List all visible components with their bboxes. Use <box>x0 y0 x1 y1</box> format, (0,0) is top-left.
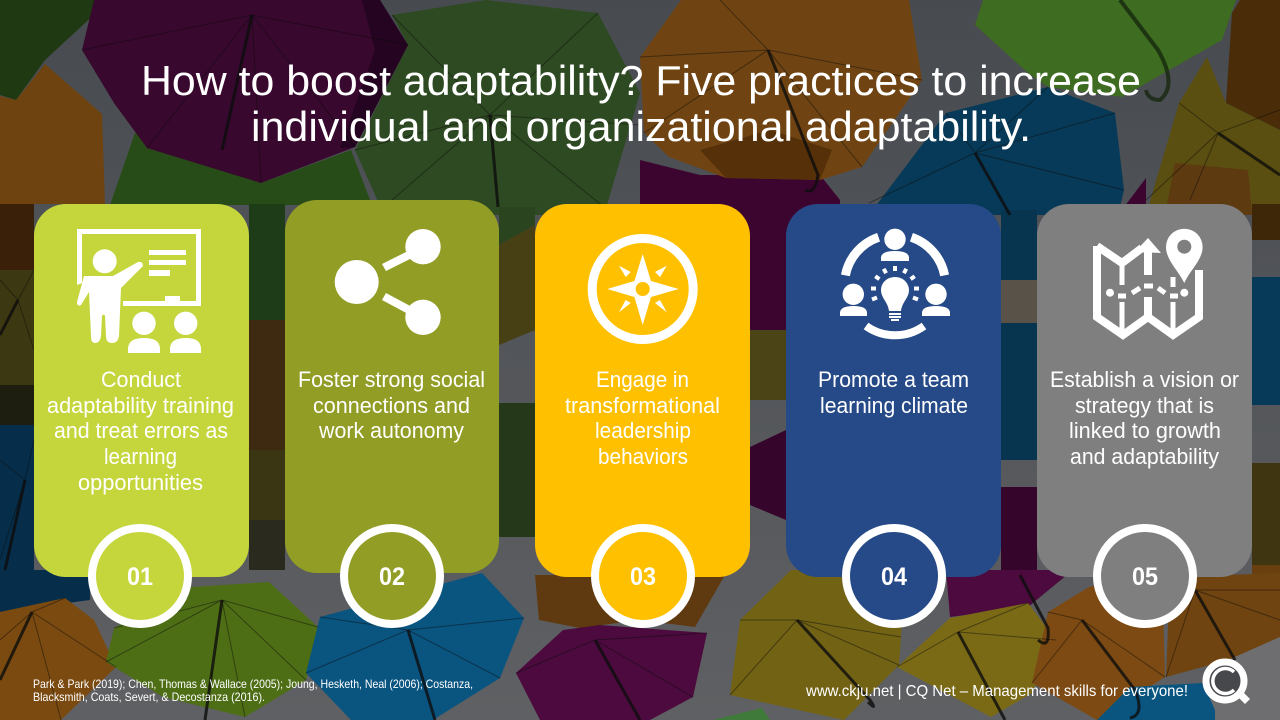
practice 04 text: learning climate <box>820 393 968 418</box>
number badge 01 <box>92 528 188 624</box>
number badge 04: 04 <box>881 563 907 591</box>
practice 01 text: opportunities <box>78 470 203 495</box>
number badge 01: 01 <box>127 563 153 591</box>
icon: map with location pin <box>1097 229 1203 335</box>
practice 04 text: Promote a team <box>818 367 969 392</box>
title: individual and organizational adaptability. <box>251 103 1031 150</box>
practice 03 text: behaviors <box>598 444 688 469</box>
practice 03 text: transformational <box>565 393 720 418</box>
practice 03 text <box>565 367 720 469</box>
top umbrellas <box>0 0 96 100</box>
practice 02 text <box>298 367 485 443</box>
number badge 02: 02 <box>379 563 405 591</box>
icon: compass <box>592 238 693 340</box>
practice 05 text: strategy that is <box>1075 393 1214 418</box>
practice 02 text: connections and <box>313 393 470 418</box>
practice 05 text <box>1050 367 1239 469</box>
number badge 04 <box>846 528 942 624</box>
panel: practice 03 <box>535 204 750 624</box>
practice 03 text: Engage in <box>596 367 689 392</box>
practice 01 text: adaptability training <box>47 393 234 418</box>
panel: practice 05 <box>1037 204 1252 624</box>
number badge 03: 03 <box>630 563 656 591</box>
practice 05 text: and adaptability <box>1070 444 1219 469</box>
practice 02 text: work autonomy <box>318 418 464 443</box>
citations footnote <box>33 677 473 704</box>
practice 03 text: leadership <box>595 418 691 443</box>
number badge 05 <box>1097 528 1193 624</box>
number badge 02 <box>344 528 440 624</box>
title: How to boost adaptability? Five practices to increase <box>141 57 1141 104</box>
icon: teacher at whiteboard <box>77 229 201 353</box>
icon: CQ logo <box>1206 662 1250 704</box>
panel: practice 04 <box>786 204 1001 624</box>
practice 05 text: Establish a vision or <box>1050 367 1239 392</box>
citations footnote: Blacksmith, Coats, Severt, & Decostanza (2016). <box>33 690 265 704</box>
icon: team with light bulb <box>840 229 950 335</box>
footer credit: www.ckju.net | CQ Net – Management skills for everyone! <box>805 683 1188 700</box>
practice 04 text <box>818 367 969 418</box>
number badge 03 <box>595 528 691 624</box>
icon: share network <box>335 229 441 335</box>
practice 01 text <box>47 367 234 495</box>
practice 01 text: and treat errors as <box>54 418 228 443</box>
practice 01 text: learning <box>104 444 177 469</box>
practice 02 text: Foster strong social <box>298 367 485 392</box>
side columns visible between cards <box>0 204 34 270</box>
panel: practice 01 <box>34 204 249 624</box>
citations footnote: Park & Park (2019); Chen, Thomas & Wallace (2005); Joung, Hesketh, Neal (2006); Costanza, <box>33 677 473 691</box>
practice 05 text: linked to growth <box>1069 418 1221 443</box>
number badge 05: 05 <box>1132 563 1158 591</box>
panel: practice 02 <box>285 200 499 624</box>
bottom umbrellas <box>0 570 90 612</box>
title <box>141 57 1141 150</box>
practice 01 text: Conduct <box>101 367 181 392</box>
